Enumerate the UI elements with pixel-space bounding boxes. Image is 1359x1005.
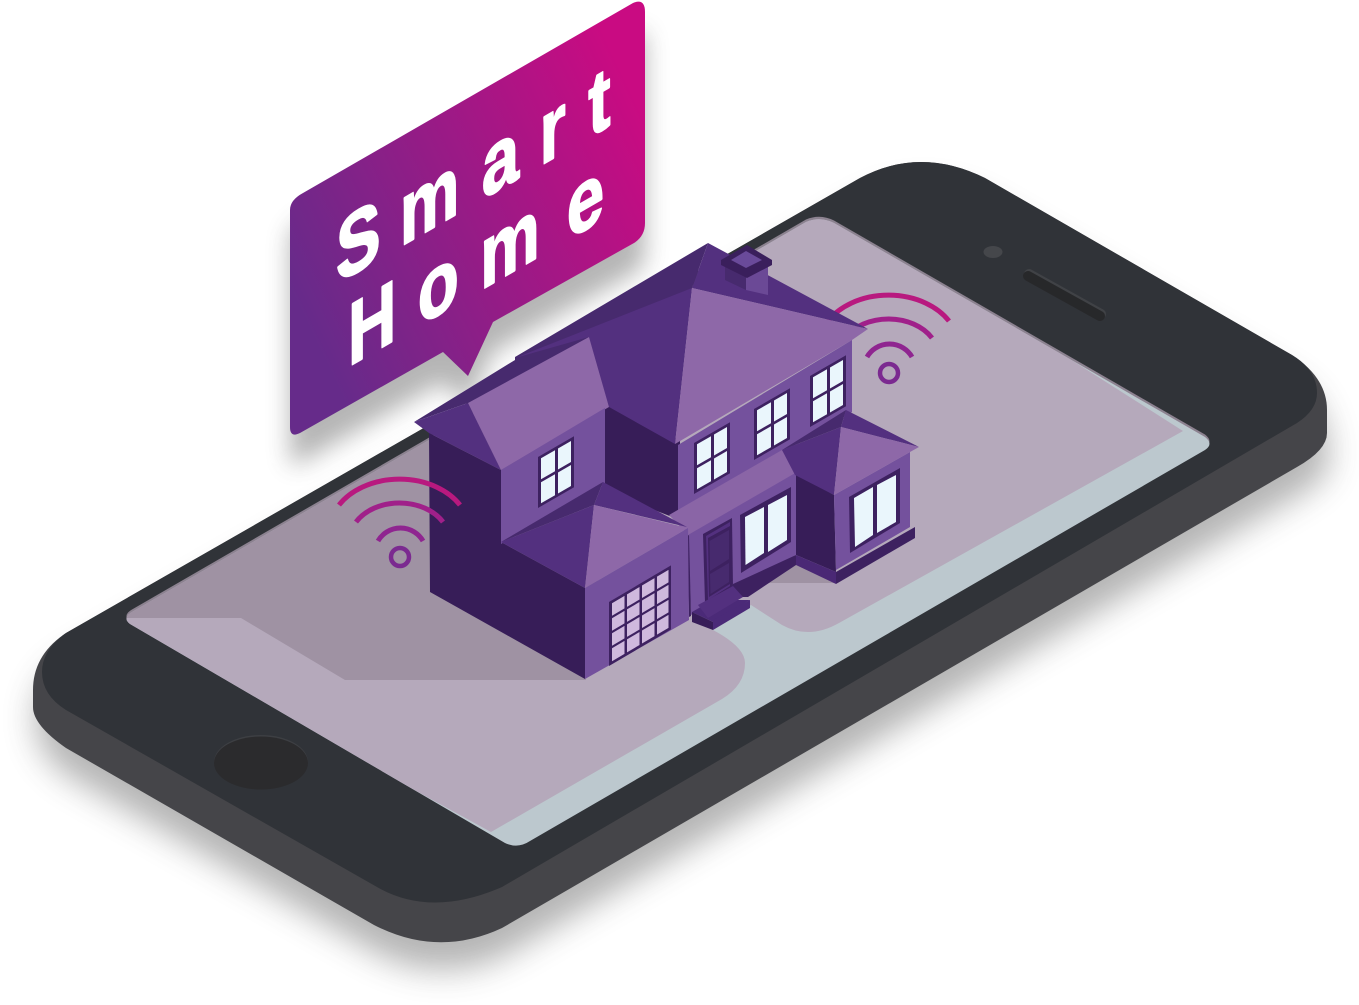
phone screen (100, 200, 1230, 860)
front camera (984, 246, 1002, 258)
porch wall (688, 470, 796, 615)
house (414, 243, 919, 679)
left wing roof hip (414, 403, 501, 470)
phone drop shadow (35, 190, 1329, 970)
window 2 (754, 388, 790, 460)
bay roof front (834, 427, 919, 495)
text: Smart: Smart (336, 45, 611, 303)
chimney (721, 245, 772, 295)
door steps (692, 586, 750, 630)
speech bubble (290, 2, 645, 435)
left wing wall (501, 408, 605, 544)
wifi icon left (339, 479, 460, 566)
phone body side (33, 162, 1327, 942)
window 3 (810, 355, 846, 427)
porch shadow (769, 565, 834, 583)
bay front wall (834, 452, 910, 570)
wifi icon right (828, 295, 949, 382)
main roof left hip (515, 288, 692, 444)
garage roof hip (501, 505, 594, 588)
bay base (796, 527, 915, 584)
garage roof front (585, 505, 688, 588)
bay dark wall (796, 473, 836, 572)
text: Home: Home (348, 139, 604, 386)
left wing window (538, 436, 574, 508)
garage roof back (501, 482, 603, 542)
right bay (782, 410, 919, 584)
bay roof back (782, 410, 846, 450)
porch base (733, 555, 796, 597)
roof underlay (414, 243, 708, 470)
porch window (740, 487, 791, 573)
bubble shape (290, 2, 645, 435)
home button (214, 735, 308, 790)
house shadow (126, 440, 586, 680)
house dark left walls (429, 400, 680, 679)
main roof front slope (675, 288, 868, 444)
speaker (1028, 274, 1101, 316)
bay roof left (782, 427, 841, 495)
left wing roof front (468, 337, 609, 470)
garage door (609, 565, 671, 666)
road and lawn (100, 200, 1230, 860)
front door (703, 518, 733, 603)
phone (33, 162, 1327, 942)
speech bubble shadow (290, 32, 645, 465)
porch divider line (687, 535, 691, 617)
screen edge (126, 217, 1209, 843)
bay roof right sliver (841, 410, 919, 447)
main roof apex slope (692, 243, 868, 329)
phone top face (42, 162, 1317, 902)
lawn (100, 200, 1183, 832)
window 1 (694, 422, 730, 494)
road (100, 200, 1230, 860)
garage wall (585, 528, 689, 679)
upper windows (694, 355, 846, 494)
porch roof (669, 450, 797, 535)
bay window (849, 468, 900, 553)
main front wall (678, 340, 852, 513)
garage roof right sliver (594, 482, 687, 527)
